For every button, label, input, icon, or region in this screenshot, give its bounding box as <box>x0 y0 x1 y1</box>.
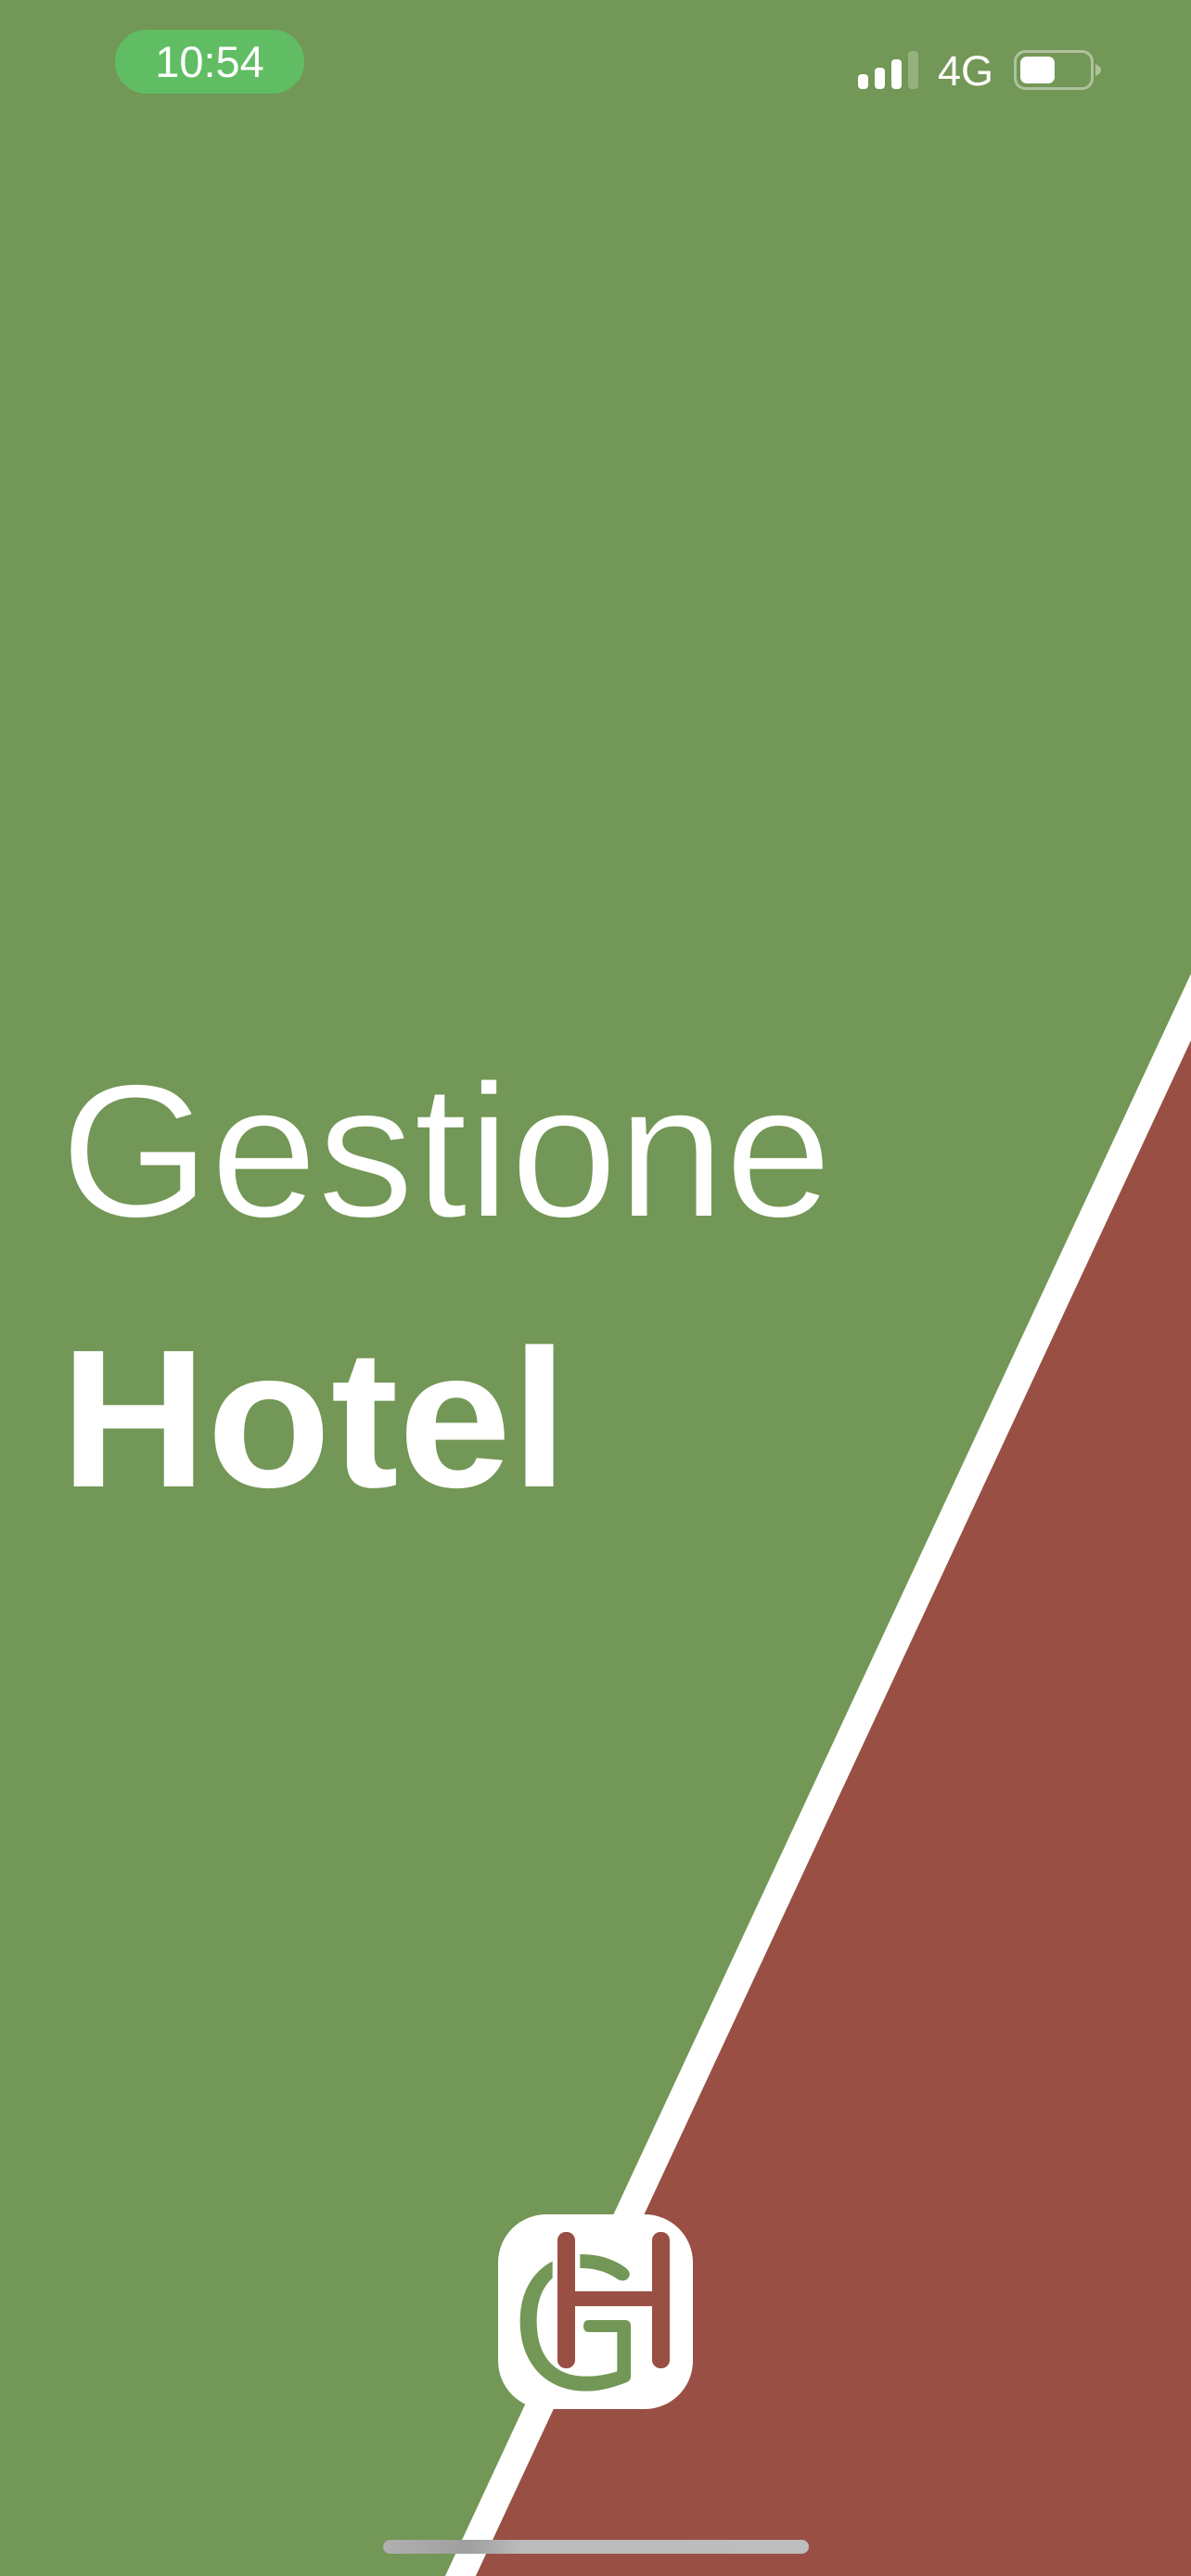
home indicator <box>383 2540 809 2554</box>
logo icon <box>498 2214 693 2409</box>
icon: signal bars <box>858 51 918 89</box>
icon: battery <box>1015 52 1101 89</box>
status bar time pill <box>115 30 304 94</box>
title line: Gestione: Gestione <box>60 1045 832 1257</box>
network label: 4G <box>938 47 993 95</box>
title line: Hotel: Hotel <box>60 1308 568 1528</box>
title <box>60 1045 832 1528</box>
red diagonal panel <box>476 1040 1191 2576</box>
logo tile <box>498 2214 693 2409</box>
logo letter G <box>520 2254 631 2391</box>
white diagonal stripe <box>445 974 1191 2576</box>
status bar time pill: 10:54 <box>155 37 264 86</box>
logo letter H <box>557 2232 670 2368</box>
